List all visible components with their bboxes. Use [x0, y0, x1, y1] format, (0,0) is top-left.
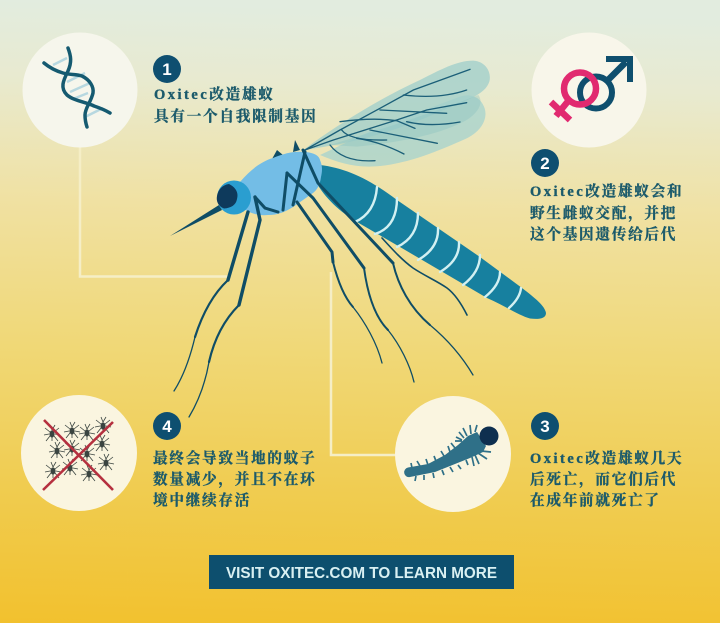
- badge 2: [531, 149, 559, 177]
- icon: male and female symbols in circle: [532, 32, 646, 148]
- panel: step 1: [22, 32, 317, 148]
- badge 4: 4: [162, 417, 172, 436]
- button: visit link: [209, 555, 514, 589]
- text: step 2: 野生雌蚁交配，并把: [530, 204, 677, 222]
- button: visit link: VISIT OXITEC.COM TO LEARN MORE: [226, 565, 497, 582]
- text: step 1: 具有一个自我限制基因: [154, 107, 317, 125]
- text: step 3: 后死亡，而它们后代: [530, 470, 677, 488]
- badge 1: 1: [162, 60, 172, 79]
- text: step 2: Oxitec改造雄蚁会和: [530, 184, 683, 200]
- panel: step 4: [21, 395, 316, 511]
- panel: step 2: [530, 32, 683, 243]
- thorax spikes: [272, 140, 300, 159]
- text: step 4: 数量减少，并且不在环: [153, 470, 316, 488]
- panel: step 3: [395, 396, 683, 512]
- icon: crossed-out mosquitoes in circle: [21, 395, 137, 511]
- mosquito abdomen: [316, 165, 546, 319]
- text: step 3: Oxitec改造雄蚁几天: [530, 451, 683, 467]
- connector: step 3 line: [331, 272, 398, 455]
- badge 4: [153, 412, 181, 440]
- text: step 4: 境中继续存活: [153, 491, 251, 509]
- thorax: [240, 152, 322, 215]
- text: step 2: 这个基因遗传给后代: [530, 225, 677, 243]
- badge 3: [531, 412, 559, 440]
- abdomen stripes: [355, 187, 521, 308]
- icon: DNA in circle: [22, 32, 138, 148]
- text: step 1: Oxitec改造雄蚁: [154, 87, 275, 103]
- icon: larva in circle: [395, 396, 511, 512]
- connector: step 1 line: [80, 145, 228, 276]
- badge 2: 2: [540, 154, 550, 173]
- mosquito wings: [303, 61, 490, 167]
- mosquito legs: [174, 150, 473, 417]
- proboscis: [170, 205, 222, 236]
- mosquito illustration: [170, 61, 546, 417]
- eye: [217, 184, 238, 208]
- text: step 3: 在成年前就死亡了: [530, 491, 661, 509]
- text: step 4: 最终会导致当地的蚊子: [153, 449, 316, 467]
- head: [217, 180, 251, 214]
- badge 1: [153, 55, 181, 83]
- badge 3: 3: [540, 417, 550, 436]
